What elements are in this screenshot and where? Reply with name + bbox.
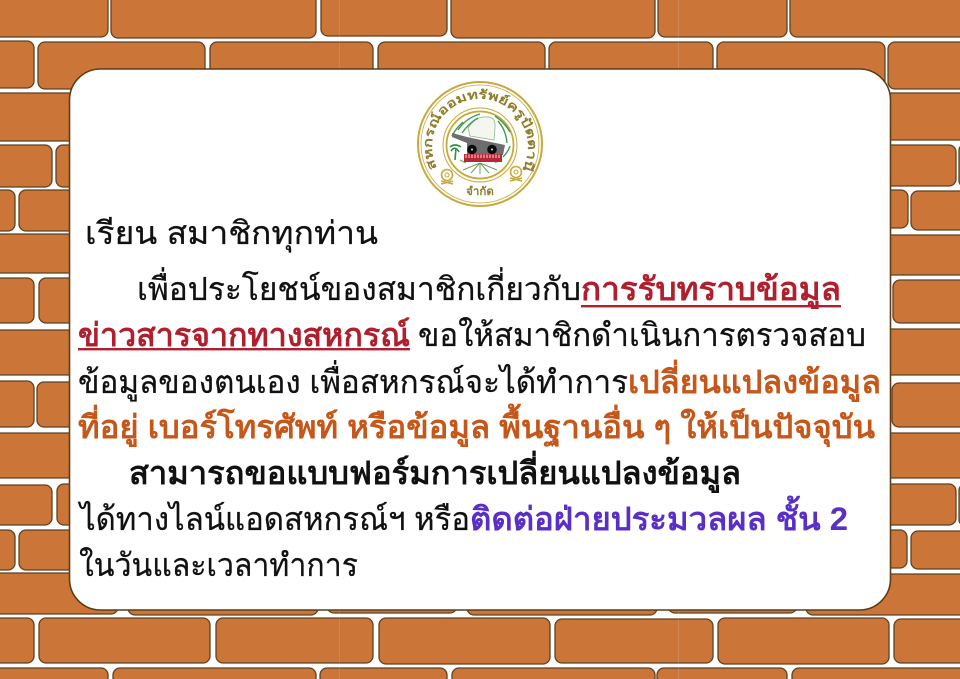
seal limited label: จำกัด <box>466 184 494 198</box>
orange emphasis: change data: เปลี่ยนแปลงข้อมูล <box>628 359 881 403</box>
orange emphasis line 5: ที่อยู่ เบอร์โทรศัพท์ หรือข้อมูล พื้นฐานอื่น ๆ ให้เป็นปัจจุบัน <box>78 403 875 448</box>
line 4: ข้อมูลของตนเอง เพื่อสหกรณ์จะได้ทำการ <box>78 360 628 402</box>
line 2: เพื่อประโยชน์ของสมาชิกเกี่ยวกับ <box>137 267 581 307</box>
red emphasis: receiving information: การรับทราบข้อมูล <box>581 271 841 310</box>
line 8: ในวันและเวลาทำการ <box>79 547 358 583</box>
seal curved name: สหกรณ์ออมทรัพย์ครูปัตตานี <box>424 88 536 172</box>
line 3: ขอให้สมาชิกดำเนินการตรวจสอบ <box>418 317 866 353</box>
seal emblem: cannon <box>452 133 505 162</box>
paragraph 1 <box>78 267 881 448</box>
salutation line: เรียน สมาชิกทุกท่าน <box>85 215 378 253</box>
logo: cooperative seal <box>417 81 543 207</box>
paragraph 2 <box>77 450 848 583</box>
white notice panel <box>70 69 890 610</box>
bold line 6: สามารถขอแบบฟอร์มการเปลี่ยนแปลงข้อมูล <box>129 450 741 494</box>
seal emblem: rock and plants <box>450 114 510 174</box>
seal rings <box>418 82 542 206</box>
red emphasis: news from the cooperative: ข่าวสารจากทางสหกรณ์ <box>78 317 410 353</box>
seal side ornaments <box>441 166 522 184</box>
line 7: ได้ทางไลน์แอดสหกรณ์ฯ หรือ <box>77 501 470 537</box>
purple emphasis: contact department: ติดต่อฝ่ายประมวลผล ชั้น 2 <box>470 495 848 537</box>
